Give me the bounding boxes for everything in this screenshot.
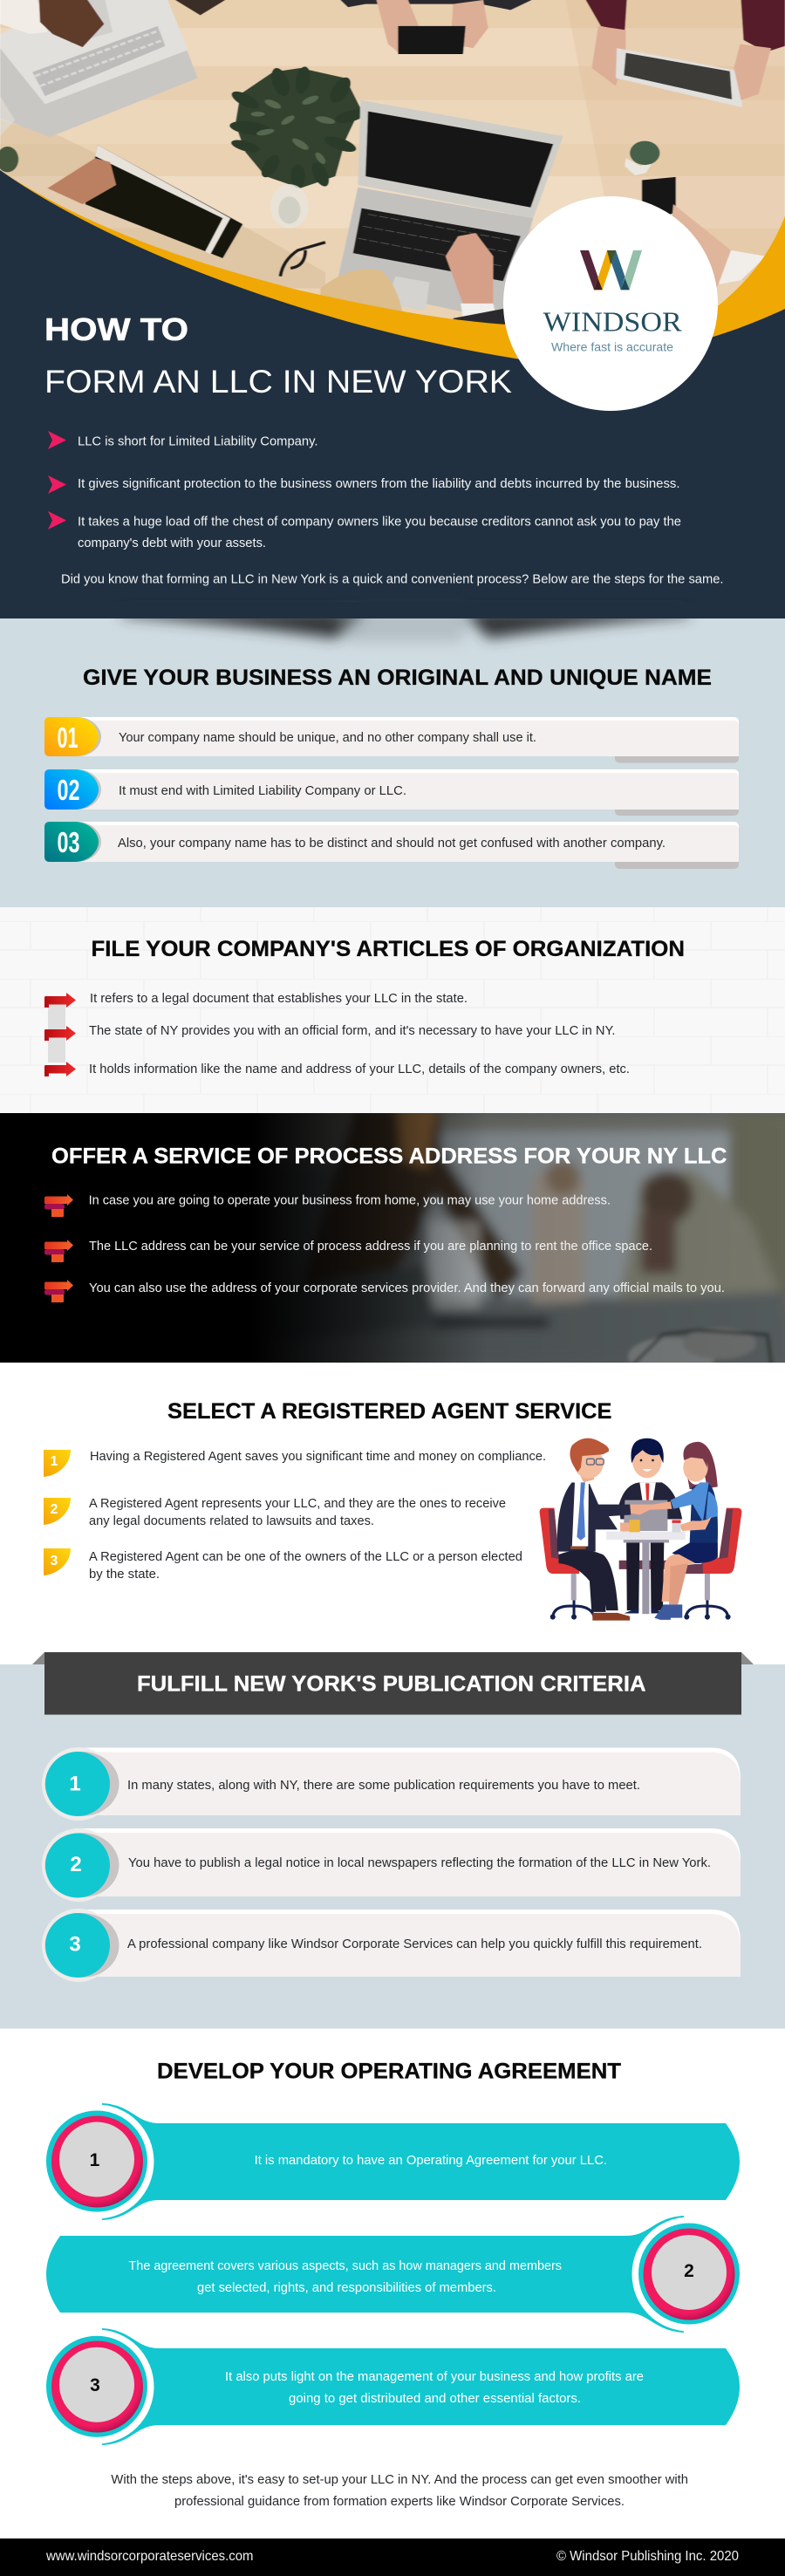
row 1 (44, 717, 739, 762)
footer: www.windsorcorporateservices.com (45, 2549, 254, 2564)
heading: SELECT A REGISTERED AGENT SERVICE (167, 1399, 612, 1424)
panel: service of process address (0, 1108, 785, 1404)
banner (44, 1652, 741, 1715)
bar 2: The agreement covers various aspects, such as how managers and members (129, 2258, 562, 2273)
intro sentence: Did you know that forming an LLC in New York is a quick and convenient process? Below are the steps for the same. (61, 572, 724, 586)
list: A Registered Agent represents your LLC, and they are the ones to receive (89, 1496, 506, 1511)
row 2: You have to publish a legal notice in local newspapers reflecting the formation of the LLC in New York. (128, 1855, 711, 1870)
bullet list: LLC is short for Limited Liability Company. (78, 434, 317, 448)
row 2: It must end with Limited Liability Company or LLC. (119, 783, 406, 798)
icons (44, 1194, 73, 1302)
row 1: In many states, along with NY, there are some publication requirements you have to meet. (127, 1778, 640, 1793)
table (624, 1538, 669, 1542)
top-right tablet and hands (586, 0, 627, 31)
list: Having a Registered Agent saves you significant time and money on compliance. (90, 1449, 546, 1464)
right phone and arm (642, 177, 676, 224)
navy panel (0, 170, 785, 618)
illustration: three business people at a table (540, 1438, 741, 1621)
centre laptop lid (358, 100, 563, 218)
top-left laptop (0, 0, 198, 137)
row 1: 01 (58, 721, 78, 754)
list: The LLC address can be your service of process address if you are planning to rent the office space. (89, 1239, 652, 1254)
laptop on table (624, 1500, 667, 1531)
list (89, 1449, 546, 1582)
banner fold right (741, 1652, 754, 1664)
bullet list: It gives significant protection to the business owners from the liability and debts incurred by the business. (78, 476, 680, 491)
row 1 (42, 1747, 741, 1821)
footer (0, 2538, 785, 2576)
left man (557, 1482, 631, 1552)
heading: DEVELOP YOUR OPERATING AGREEMENT (157, 2059, 621, 2083)
banner: FULFILL NEW YORK'S PUBLICATION CRITERIA (137, 1672, 645, 1697)
list (89, 1193, 725, 1295)
heading: GIVE YOUR BUSINESS AN ORIGINAL AND UNIQUE NAME (83, 666, 712, 690)
list: by the state. (89, 1567, 160, 1582)
closing text (111, 2472, 688, 2509)
row 1: Your company name should be unique, and no other company shall use it. (119, 730, 536, 745)
badge 1 (44, 1450, 71, 1477)
row 3 (42, 1909, 741, 1982)
yellow swoosh (0, 170, 785, 359)
logo tagline: Where fast is accurate (551, 340, 673, 354)
panel: operating agreement (0, 2029, 785, 2538)
list: It refers to a legal document that establishes your LLC in the state. (90, 991, 468, 1006)
row 3: 3 (69, 1933, 81, 1956)
panel: file articles of organization (0, 907, 785, 1113)
centre laptop base (337, 188, 533, 320)
centre man (619, 1482, 682, 1520)
bar 2: 2 (684, 2261, 694, 2281)
heading: FILE YOUR COMPANY'S ARTICLES OF ORGANIZATION (91, 937, 685, 961)
bar 3: going to get distributed and other essential factors. (289, 2391, 581, 2406)
bar 3 (40, 2328, 740, 2445)
top phone and hands (340, 0, 532, 10)
woman (683, 1442, 718, 1488)
row 1: 1 (69, 1773, 81, 1795)
plant (229, 65, 368, 188)
bar 1: It is mandatory to have an Operating Agreement for your LLC. (255, 2153, 607, 2168)
row 2: 02 (58, 774, 80, 806)
list: It holds information like the name and address of your LLC, details of the company owners, etc. (89, 1062, 630, 1076)
footer: © Windsor Publishing Inc. 2020 (556, 2549, 739, 2564)
water glass (270, 184, 309, 229)
blonde hair (320, 269, 403, 317)
list: You can also use the address of your corporate services provider. And they can forward any official mails to you. (89, 1281, 725, 1295)
row 2: 2 (70, 1853, 82, 1876)
small potted plant (625, 155, 657, 175)
black tablet and hand (85, 145, 242, 258)
row 2 (42, 1828, 741, 1902)
row 2 (44, 769, 739, 816)
panel: publication criteria (0, 1652, 785, 2029)
bullet list: company's debt with your assets. (78, 536, 266, 550)
list (89, 991, 630, 1076)
row 3: 03 (58, 826, 80, 858)
reading glasses (280, 243, 325, 277)
top shadow (0, 602, 785, 642)
background office photo (0, 1113, 785, 1363)
logo wordmark: WINDSOR (543, 305, 682, 337)
badge 2 (44, 1498, 71, 1525)
bullet list (48, 431, 681, 550)
list: A Registered Agent can be one of the owners of the LLC or a person elected (89, 1549, 522, 1564)
row 3 (44, 822, 739, 869)
title (44, 311, 512, 400)
row 3: Also, your company name has to be distinct and should not get confused with another company. (118, 836, 666, 851)
bar 2 (46, 2216, 747, 2333)
title: HOW TO (44, 311, 188, 347)
list: In case you are going to operate your business from home, you may use your home address. (89, 1193, 611, 1208)
handshake (630, 1501, 672, 1514)
panel: give your business a name (0, 602, 785, 907)
list: The state of NY provides you with an official form, and it's necessary to have your LLC in NY. (89, 1023, 616, 1038)
chairs (540, 1508, 579, 1574)
bar 3: 3 (90, 2375, 100, 2395)
bar 3: It also puts light on the management of your business and how profits are (225, 2369, 644, 2384)
panel: registered agent (0, 1363, 785, 1664)
title: FORM AN LLC IN NEW YORK (44, 364, 512, 400)
mug (630, 1520, 640, 1532)
closing text: professional guidance from formation experts like Windsor Corporate Services. (174, 2494, 625, 2509)
panel: hero (0, 0, 785, 618)
badge 2: 2 (51, 1502, 58, 1517)
badge 3: 3 (51, 1554, 58, 1568)
bar 1 (40, 2103, 740, 2220)
bullet list: It takes a huge load off the chest of company owners like you because creditors cannot ask you to pay the (78, 514, 681, 529)
bar 2: get selected, rights, and responsibilities of members. (197, 2280, 496, 2295)
logo mark (580, 250, 642, 290)
row 3: A professional company like Windsor Corporate Services can help you quickly fulfill this requirement. (127, 1937, 702, 1951)
hero photo: team at wooden table (0, 0, 785, 385)
heading: OFFER A SERVICE OF PROCESS ADDRESS FOR YOUR NY LLC (51, 1145, 727, 1169)
list: any legal documents related to lawsuits and taxes. (89, 1513, 374, 1528)
closing text: With the steps above, it's easy to set-up your LLC in NY. And the process can get even smoother with (111, 2472, 688, 2487)
banner fold left (32, 1652, 44, 1664)
badge 3 (44, 1548, 71, 1575)
bar 1: 1 (90, 2150, 100, 2170)
badge 1: 1 (51, 1454, 58, 1469)
arrow connector (44, 993, 76, 1076)
glasses on the table (523, 1328, 785, 1404)
logo circle (503, 196, 718, 411)
typing hand and sleeve (446, 233, 493, 304)
